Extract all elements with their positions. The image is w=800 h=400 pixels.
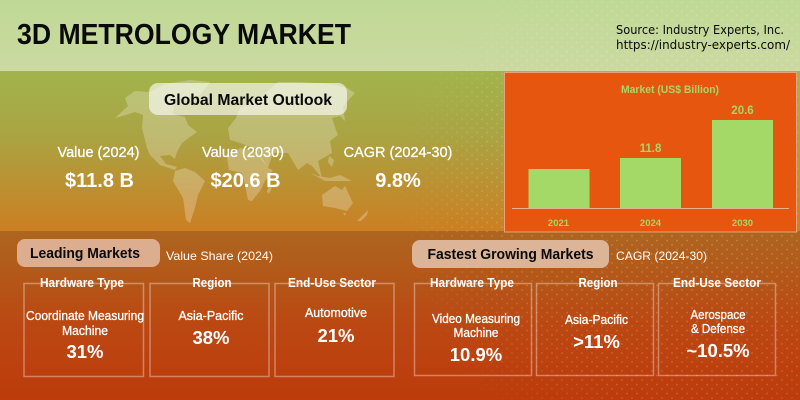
- stat: value 2030: $20.6 B: [210, 170, 281, 192]
- stat: value 2024: Value (2024): [58, 145, 139, 161]
- bar: 2024: 2024: [640, 218, 662, 229]
- card: leading hardware type: Hardware Type: [40, 276, 124, 290]
- stat: value 2024: $11.8 B: [65, 170, 134, 192]
- fastest growing heading: [412, 240, 609, 268]
- background: markets band: [0, 231, 800, 400]
- title: 3D METROLOGY MARKET: [17, 19, 352, 51]
- stat: cagr: [344, 145, 452, 192]
- bar chart panel: [504, 72, 796, 232]
- card: leading end-use sector: End-Use Sector: [288, 276, 376, 290]
- bar: 2030: 20.6: [731, 105, 754, 117]
- bar: 2024: 11.8: [640, 143, 662, 155]
- bar: 2030: 2030: [732, 218, 753, 229]
- card: leading hardware type: Machine: [62, 324, 108, 338]
- source note: [616, 23, 791, 52]
- card: leading end-use sector: Automotive: [305, 306, 367, 320]
- card: fastest end-use sector: End-Use Sector: [673, 276, 761, 290]
- card: leading region: 38%: [192, 327, 230, 348]
- stat: value 2030: [202, 145, 284, 192]
- fastest growing note: CAGR (2024-30): [616, 249, 707, 263]
- bar: 2021: 2021: [548, 218, 570, 229]
- fastest growing heading: Fastest Growing Markets: [428, 247, 594, 263]
- leading markets note: Value Share (2024): [166, 249, 273, 263]
- card: fastest region: Region: [578, 276, 618, 290]
- card: fastest end-use sector: Aerospace: [690, 308, 746, 322]
- world map: [115, 80, 368, 223]
- card: fastest region: [536, 276, 654, 376]
- card: fastest end-use sector: & Defense: [691, 322, 745, 336]
- card: leading hardware type: Coordinate Measuring: [26, 309, 144, 323]
- card: fastest hardware type: Machine: [454, 326, 499, 340]
- card: leading hardware type: [24, 276, 144, 376]
- card: leading end-use sector: 21%: [317, 325, 355, 346]
- card: fastest region: Asia-Pacific: [565, 313, 628, 327]
- card: leading region: Region: [192, 276, 232, 290]
- card: leading region: [150, 276, 269, 376]
- bar: 2021: [528, 169, 590, 229]
- stat: cagr: 9.8%: [375, 170, 421, 192]
- background: header band: [0, 0, 800, 71]
- leading markets heading: [17, 239, 160, 267]
- card: fastest hardware type: [414, 276, 532, 376]
- card: fastest hardware type: Hardware Type: [430, 276, 514, 290]
- chart title: Market (US$ Billion): [621, 84, 719, 96]
- source note: Source: Industry Experts, Inc.: [616, 23, 784, 37]
- card: leading region: Asia-Pacific: [178, 309, 244, 323]
- stat: cagr: CAGR (2024-30): [344, 145, 452, 161]
- leading markets heading: Leading Markets: [30, 246, 140, 262]
- card: leading end-use sector: [275, 276, 394, 376]
- card: leading hardware type: 31%: [66, 341, 104, 362]
- card: fastest region: >11%: [573, 331, 620, 352]
- stat: value 2030: Value (2030): [202, 145, 284, 161]
- card: fastest end-use sector: [658, 276, 776, 376]
- card: fastest hardware type: 10.9%: [450, 344, 502, 365]
- card: fastest hardware type: Video Measuring: [432, 312, 520, 326]
- background: outlook band: [0, 71, 800, 231]
- outlook heading pill: [149, 83, 347, 115]
- source note: https://industry-experts.com/: [616, 38, 791, 52]
- outlook heading pill: Global Market Outlook: [164, 92, 332, 109]
- bar: 2024: [620, 143, 681, 229]
- stat: value 2024: [58, 145, 139, 192]
- bar: 2030: [712, 105, 773, 229]
- card: fastest end-use sector: ~10.5%: [686, 340, 750, 361]
